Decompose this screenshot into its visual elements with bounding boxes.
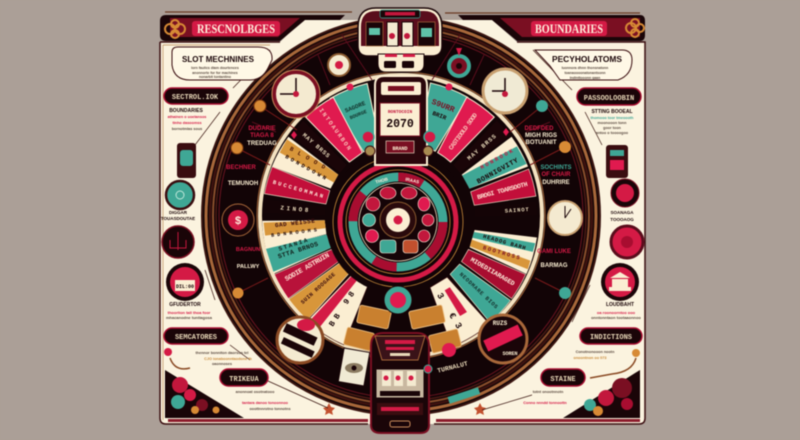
header band: right — [445, 13, 645, 41]
icon: clock top-left — [272, 70, 320, 118]
wedge: black 48: MAY BRSS — [466, 133, 498, 162]
inner-band labels left: BAGNUN — [236, 247, 260, 253]
text: loudbaht: LOUDBAHT — [606, 302, 634, 308]
text: diagnostic: DIGGAR — [169, 210, 188, 215]
text: boundaries: tinho dasoomss — [172, 121, 202, 125]
subheading: psychology: PECYHOLATOMS — [552, 55, 623, 64]
callout: round right — [479, 315, 527, 363]
spokes — [252, 35, 550, 132]
text: bubble body right: toanaoooonatonantsonn — [564, 71, 606, 75]
wedge: cream orange -61: BLOOD — [288, 145, 327, 171]
label: turnalut: TURNALUT — [437, 360, 469, 375]
wedge: orange -132 — [288, 258, 354, 321]
wedge: black -85 — [263, 199, 326, 218]
text: bubble body right — [562, 66, 608, 80]
text: gfudertor — [166, 302, 213, 320]
text: boundaries — [168, 108, 206, 131]
wedge: cream orange -96: GAD WEISSE — [275, 217, 316, 229]
text: bubble body: nonarbit tontantino — [199, 75, 231, 79]
slot machine: centre panel top: RONTOCOIN — [388, 109, 412, 115]
wedge: teal 21: S9URR — [430, 98, 456, 115]
wedge: cream 148 — [420, 271, 490, 348]
wedge: cream orange 96: HEADOG BARH — [482, 233, 526, 252]
text: boundaries: athainen o uoelansos — [168, 115, 206, 119]
wedge: cream 148: 3 €3 — [434, 291, 464, 331]
icon: device right — [606, 145, 628, 178]
gauges: clocks — [222, 48, 582, 236]
text: gfudertor: GFUDERTOR — [169, 302, 201, 308]
wedge: teal -22: BOURGE — [349, 109, 368, 121]
wedge: cream orange -61: BONDDOWN — [284, 153, 328, 182]
ornaments bottom — [323, 403, 486, 415]
hub tokens — [362, 187, 434, 253]
text: bubble body: lorn faulics diam dourtences — [191, 66, 239, 70]
art: corner illustration right — [563, 370, 640, 418]
text: diagnostics right: TOOOAOG — [610, 217, 634, 222]
text: setting: antoo o toooogoo — [596, 131, 629, 135]
inner-band labels right: BOTUANIT — [526, 140, 557, 146]
inner-band labels right: DEDFDED — [524, 126, 554, 132]
inner-band labels left: BECHNER — [226, 165, 256, 171]
text: diagnostic — [161, 210, 195, 221]
icon: red meter: DIL:00 — [176, 284, 194, 290]
callout: round right: SOREN — [502, 351, 518, 357]
text: semcatores body: thennor bonniton daorson tel — [196, 351, 248, 355]
text: indictions body — [574, 350, 615, 360]
wedge: black -85: ZINO8 — [280, 205, 309, 214]
speech bubble — [172, 47, 272, 80]
text: setting: thomooo toor tmeoooth — [590, 116, 634, 120]
figure: 2070: 2070 — [386, 118, 414, 131]
subheading: slot machines: SLOT MECHNINES — [182, 54, 254, 64]
inner-band labels right: GAMI LUKE — [537, 249, 571, 255]
text: trikeua body: tantara danoo tonoonnoo — [242, 401, 289, 405]
text: indictions body: Conotnonooon nootn — [576, 350, 615, 354]
text: setting: STTING BOOEAL — [591, 109, 633, 115]
text: diagnostic: TOUASDOUTAE — [161, 216, 195, 221]
wedge: teal 21: BRIR — [431, 110, 448, 122]
text: trikeua body: ooottnnrotno tonnotns — [249, 407, 291, 411]
panel: left cream backing — [160, 20, 400, 424]
wheel: outer rim — [202, 17, 600, 415]
icon: small dial top-left — [328, 54, 350, 76]
inner-band labels right: MIGH RIGS — [525, 133, 557, 139]
icon: dark dial — [162, 226, 194, 258]
wedge: red 35: CASTIOOLD SOOD — [448, 112, 479, 152]
dots and connectors — [231, 100, 571, 299]
inner-band labels right: OF CHAIR — [542, 172, 571, 178]
icon: red gauge — [611, 179, 639, 207]
inner-band labels right — [524, 126, 572, 269]
inner-band labels left: PALLWY — [237, 264, 260, 270]
icon: knot ornament — [165, 20, 185, 38]
wedge: red 119: MIOEDIIARAGED — [469, 256, 516, 288]
pill: semcatores: SEMCATORES — [175, 334, 217, 342]
wedge: red -36: INTOAURBON — [317, 107, 353, 152]
wedge: cream orange -61 — [271, 136, 343, 197]
inner-band labels left — [226, 126, 277, 270]
icon: target top-right — [447, 48, 471, 78]
text: trikeua body: anonnoat osotnatooo — [236, 390, 275, 394]
icon: coin left — [222, 204, 254, 236]
heading: right: BOUNDARIES — [535, 22, 603, 36]
text: semcatores body: oaonnoses — [212, 362, 232, 366]
wedge: red -120 — [274, 243, 342, 299]
wedge: teal -108: STTA BRNOS — [277, 241, 319, 260]
inner-band labels left: TIAGA 8 — [250, 133, 274, 139]
pill: passo: PASSOOLOOBIN — [584, 95, 634, 103]
text: staine body: totnt onootnnotn — [533, 390, 564, 394]
wedge: red 119 — [458, 243, 526, 299]
hub core — [380, 202, 416, 238]
wedge: red -73 — [264, 167, 332, 211]
inner-band labels left: TEMUNOH — [228, 181, 258, 187]
wedge: teal -108 — [265, 228, 333, 274]
wedge: black 84 — [474, 201, 537, 220]
wedge: cream red -147 — [306, 269, 378, 346]
pill: indictions — [580, 328, 642, 344]
wedge: cream orange -96 — [262, 213, 327, 249]
orange coupons bottom — [343, 305, 462, 353]
icon: knot ornament right — [626, 19, 644, 37]
pill: trikeua — [220, 369, 268, 386]
inner-band labels left: DUDARIE — [248, 126, 276, 132]
wedges: left side — [262, 82, 390, 346]
pill: trikeua: TRIKEUA — [229, 376, 260, 384]
heading: left: RESCNOLBGES — [197, 22, 275, 36]
label: turnalut — [437, 343, 480, 404]
wedge: cream teal 60: MONROOK — [479, 147, 515, 171]
slot machine: centre panel top — [362, 76, 436, 165]
wedge: black 84: SAINOT — [505, 206, 530, 215]
pill: sectrol: SECTROL.IOK — [172, 94, 219, 102]
wedge: cream orange 96: BOOTROSS — [482, 244, 521, 262]
hub: centre wheel — [326, 150, 470, 294]
wedge: red -36 — [305, 96, 370, 167]
wedge: cream teal 60 — [457, 136, 529, 197]
pill: passo — [577, 88, 641, 105]
text: trikeua body — [236, 390, 291, 411]
pill: sectrol — [164, 88, 228, 104]
connector lines — [195, 50, 602, 410]
text: boundaries: BOUNDARIES — [169, 108, 203, 114]
text: gfudertor: mhacanodne tuntiagosa — [166, 315, 213, 320]
wedge: red -120: SODIE ASTRUIN — [284, 252, 331, 284]
wedge: red 35 — [430, 96, 495, 167]
text: setting: goor toon — [603, 126, 622, 130]
panel content: right column — [523, 50, 643, 418]
icon: red pin — [164, 348, 190, 369]
text: gfudertor: thoorlion tall thoa foor — [168, 310, 211, 315]
text: bubble body: anonnorte for for machines — [192, 71, 238, 75]
wedge: orange -132: SUIN ROOGAGE — [299, 271, 337, 306]
text: semcatores body — [196, 351, 253, 366]
wedge: teal 21 — [408, 82, 468, 155]
text: bubble body right: Indinttooonn gaan — [570, 76, 600, 80]
wedge: teal -108: STANIA — [278, 237, 309, 253]
pill: staine: STAINE — [550, 376, 576, 384]
text: loudbaht: onntonntaon tootaaonnoo — [591, 315, 641, 320]
pill: indictions: INDICTIONS — [590, 334, 632, 342]
text: loudbaht — [591, 302, 641, 320]
wedge: red -73: BUCCEOMMAN — [272, 179, 324, 200]
text: diagnostics right: SOANAGA — [610, 210, 634, 215]
inner-band labels right: BARMAG — [540, 263, 568, 269]
speech bubble right — [535, 50, 632, 80]
text: staine body: Conno nnndd tonnoottn — [523, 401, 567, 405]
slot machine: top — [358, 8, 442, 72]
ring labels — [375, 176, 420, 185]
slot machine: centre panel top: BRAND — [392, 146, 408, 152]
icon: bank — [601, 263, 639, 301]
pill: staine — [541, 369, 585, 386]
wedge: cream orange -96: BDNROOMS — [271, 227, 317, 239]
callout: round right: RUZS — [493, 320, 508, 327]
wedge: black 48 — [450, 120, 510, 176]
wedge: teal 132: NEODMARE BIOS — [458, 271, 500, 311]
wedge: red 74 — [469, 169, 537, 212]
wedge: cream teal 60: BONNIGVITY — [476, 157, 521, 186]
wedge: cream orange 96 — [467, 220, 538, 274]
wedge: teal -22: SAGORE — [344, 100, 367, 114]
icon: clock top-right — [483, 69, 527, 113]
wedge: teal 132 — [445, 258, 511, 323]
panel: right cream backing — [400, 20, 645, 424]
pill: semcatores — [164, 328, 228, 344]
text: setting: moonooon tonn — [598, 121, 627, 125]
art: corner illustration left — [165, 370, 244, 418]
eye card bottom left — [338, 348, 370, 386]
inner-band labels right: SOCHINTS — [540, 165, 572, 171]
wedge: black -49 — [290, 121, 350, 176]
teal top hub button under wheel — [384, 286, 412, 314]
ring labels: IRAAS — [405, 177, 420, 184]
wedge: teal -22 — [330, 82, 390, 156]
text: setting — [590, 109, 634, 135]
callout: round left — [277, 317, 323, 363]
wedge: cream red -147: BB 98 — [328, 290, 357, 329]
icon: red meter — [166, 263, 204, 301]
icon: device — [177, 143, 196, 178]
ring labels: THOB — [375, 176, 389, 185]
header band: left — [160, 12, 352, 41]
text: bubble body — [191, 66, 239, 79]
icon: red wheel — [611, 226, 643, 258]
text: staine body — [523, 390, 567, 405]
text: semcatores body: CJO ionaboonntaodone th — [204, 357, 253, 361]
ring pins — [291, 84, 509, 139]
text: loudbaht: oa roonoorntoo ooo — [597, 310, 636, 315]
icon: coin left: $ — [235, 215, 241, 227]
icon: orange pin right — [590, 349, 640, 378]
slot machine: bottom — [371, 333, 432, 433]
text: boundaries: bornotmlas sous — [172, 127, 202, 131]
icon: clock right — [548, 201, 582, 235]
text: diagnostics right — [610, 210, 634, 222]
wedge: red 74: BROGI TOARSOOTH — [476, 181, 529, 201]
wedge: black -49: MAY BRSS — [301, 132, 331, 160]
inner-band labels left: TREDUAG — [247, 141, 277, 147]
icon: teal gauge — [166, 181, 194, 209]
text: bubble body right: Iuonnora dhnn thonsnatonn — [562, 66, 608, 70]
wedges: right side — [408, 82, 538, 348]
inner-band labels right: DUHRIRE — [542, 180, 570, 186]
text: indictions body: onoontnon oo 073 — [574, 356, 606, 360]
panel content: left column — [161, 47, 291, 418]
